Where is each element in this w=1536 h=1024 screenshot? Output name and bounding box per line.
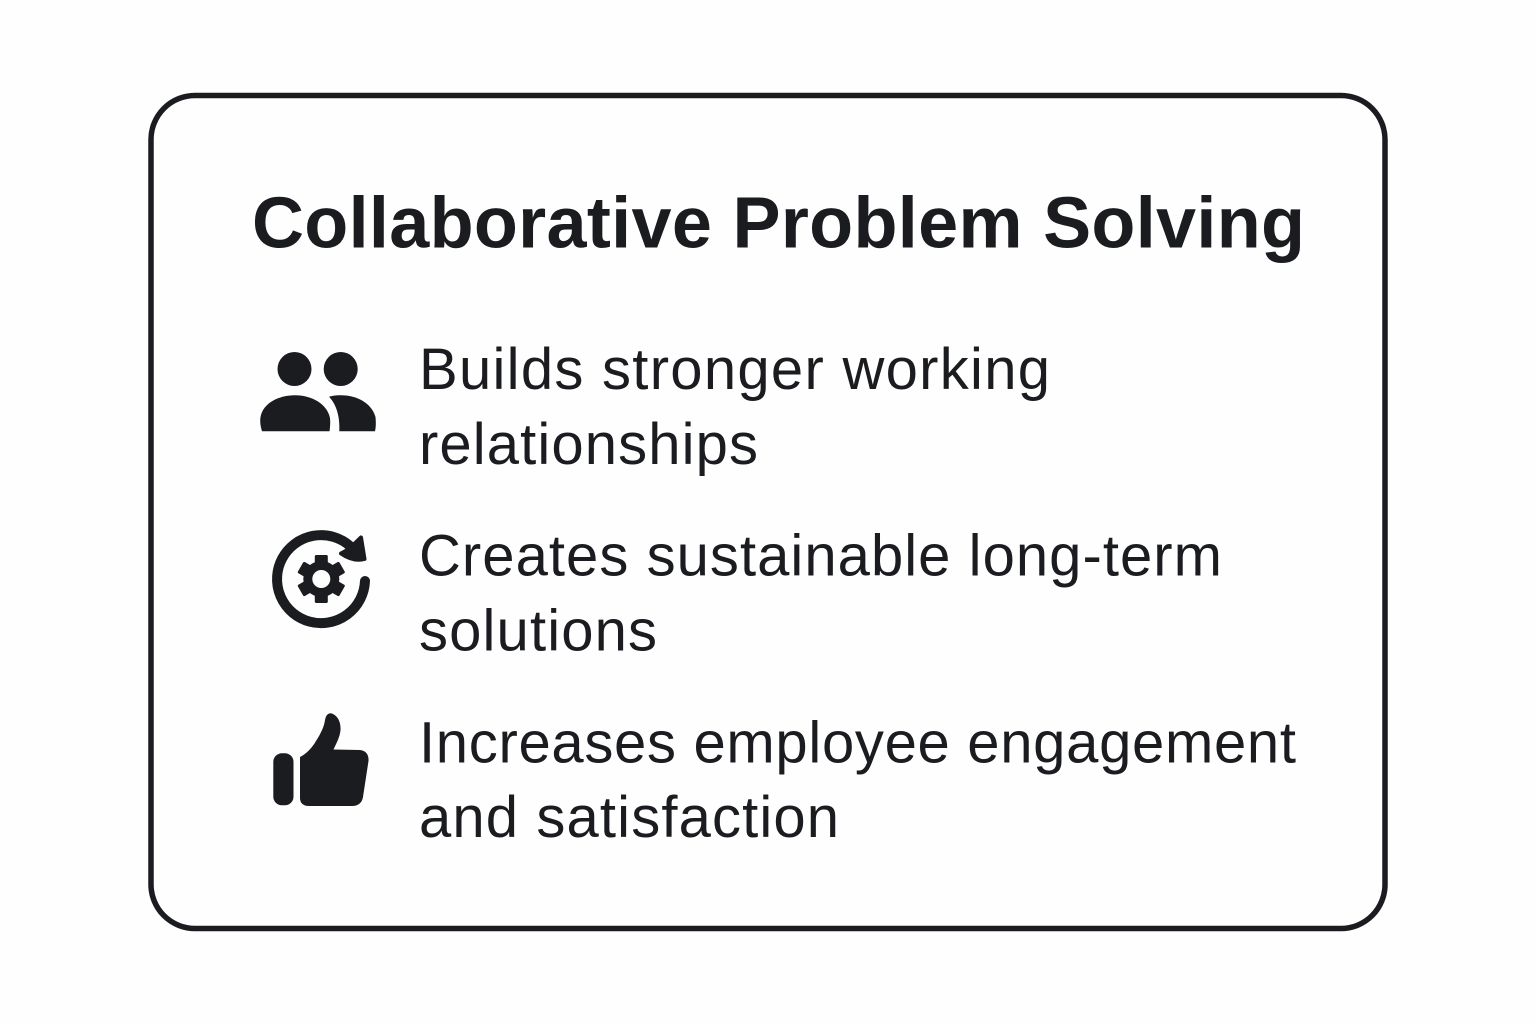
icon: gear with circular arrow	[277, 535, 365, 623]
text: creates sustainable long-term solutions: solutions	[419, 598, 657, 664]
text: builds stronger working relationships: Builds stronger working	[419, 337, 1050, 402]
text: increases employee engagement and satisfaction	[419, 710, 1296, 850]
text: increases employee engagement and satisfaction: and satisfaction	[419, 785, 839, 850]
icon: two people	[260, 352, 376, 431]
text: creates sustainable long-term solutions: Creates sustainable long-term	[419, 524, 1222, 588]
text: creates sustainable long-term solutions	[419, 524, 1222, 664]
text: increases employee engagement and satisfaction: Increases employee engagement	[419, 710, 1296, 776]
icon: thumbs up	[273, 713, 369, 806]
panel: card	[151, 96, 1385, 928]
text: builds stronger working relationships	[419, 337, 1050, 477]
title: Collaborative Problem Solving	[252, 184, 1305, 264]
text: builds stronger working relationships: relationships	[419, 412, 758, 477]
